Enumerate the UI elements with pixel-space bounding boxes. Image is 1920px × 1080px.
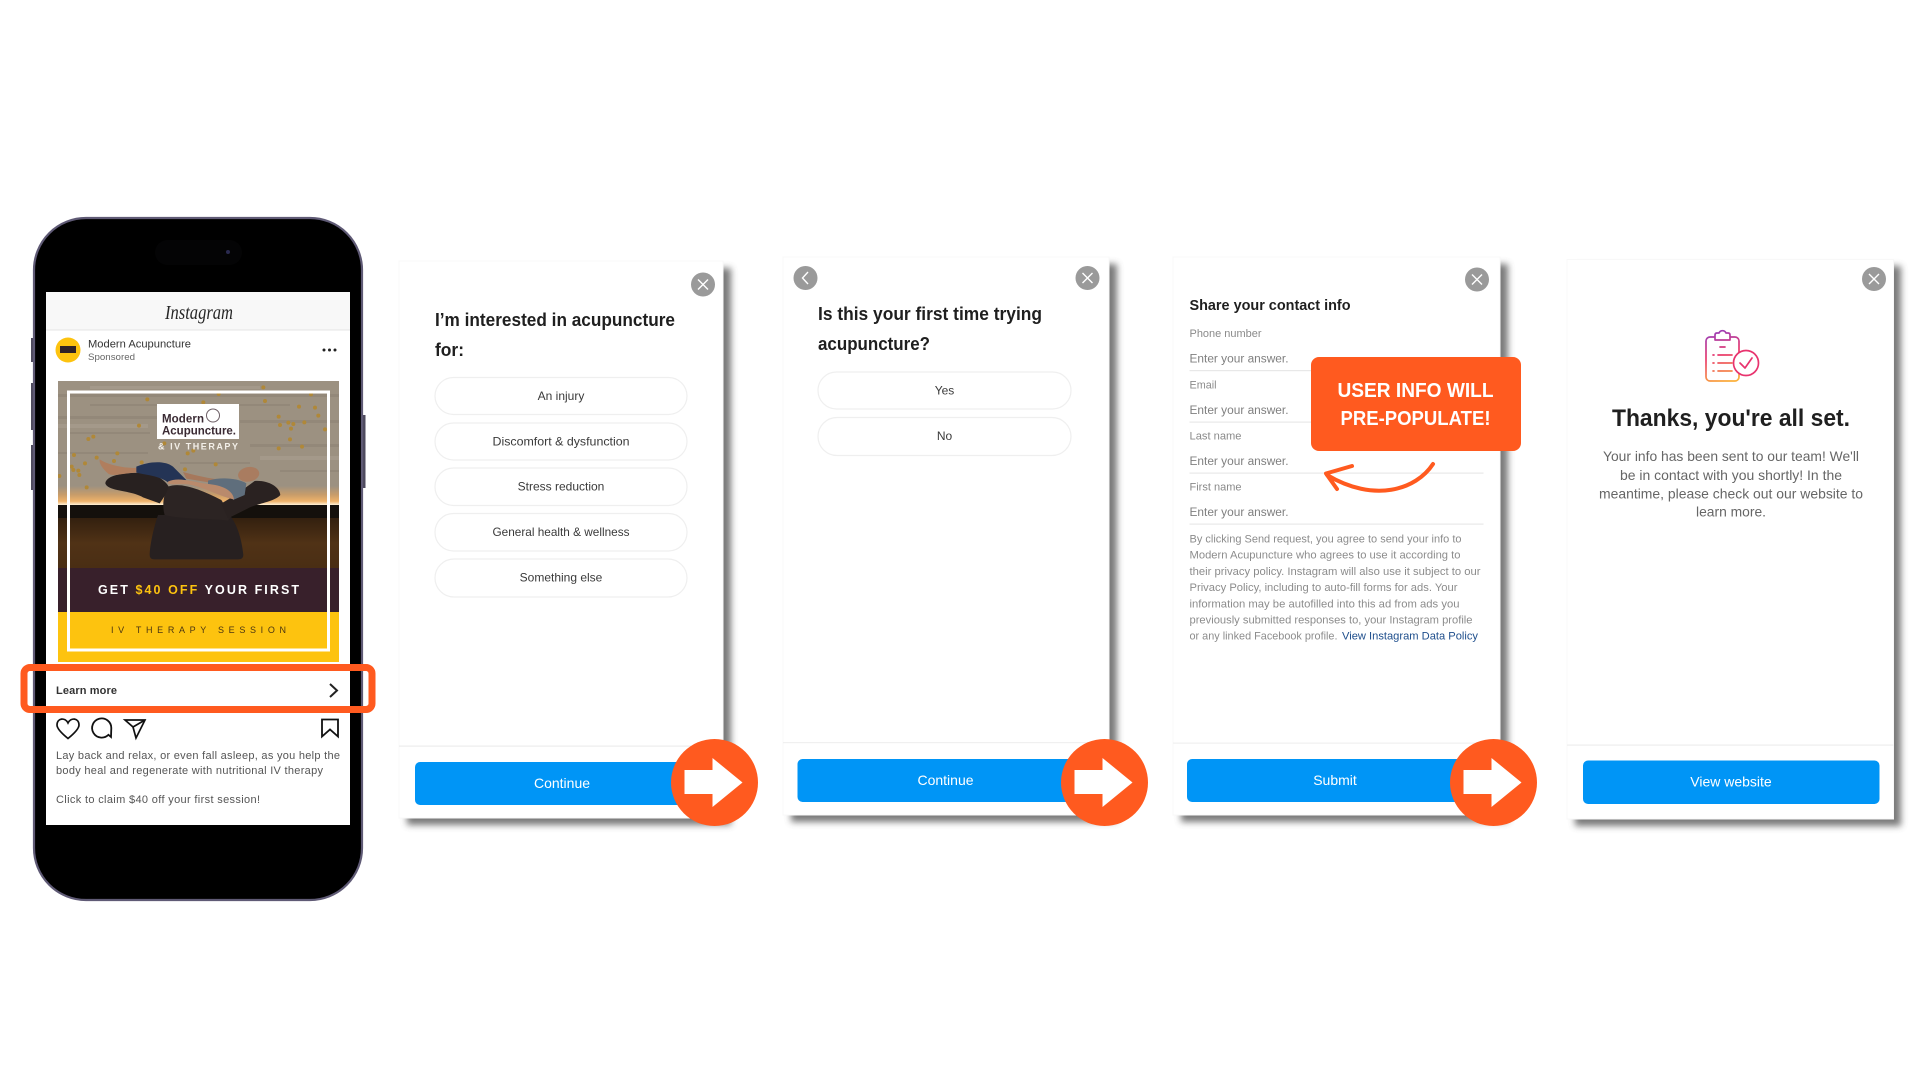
instagram header bar: Instagram [164,302,233,324]
panel: question 2 [783,257,1117,822]
consent text: By clicking Send request, you agree to send your info to [1190,534,1462,546]
answer options: General health & wellness [492,525,630,539]
question heading [435,310,675,360]
learn more row [56,684,337,697]
dynamic island and camera [155,240,242,265]
panel shadow [1575,266,1901,826]
footer divider [1173,742,1500,744]
consent text: or any linked Facebook profile. [1190,630,1338,642]
form fields: Enter your answer. [1190,507,1288,519]
panel shadow [791,264,1117,822]
form fields: Email [1190,380,1216,392]
phone side buttons [31,338,366,490]
arrow badge 1 [671,739,758,826]
form fields: Enter your answer. [1190,405,1288,417]
panel: contact form [1173,257,1508,822]
arrow badge 3 [1450,739,1537,826]
logo box: Acupuncture. [162,426,236,438]
curved arrow to form [1326,464,1433,491]
close button [1076,266,1100,290]
logo box [157,404,239,439]
confirmation message: learn more. [1696,504,1766,520]
gold dots [57,385,327,489]
answer options: Stress reduction [518,480,604,494]
form fields [1190,328,1484,525]
panel card [783,257,1109,815]
form fields: Last name [1190,430,1242,442]
answer options: Yes [935,384,954,398]
answer options [818,372,1071,456]
therapy label: & IV THERAPY [158,442,238,452]
question heading [818,304,1042,354]
post caption [56,750,340,806]
highlight rectangle [24,668,372,710]
callout: user info: PRE-POPULATE! [1340,408,1490,430]
close button [1465,268,1489,292]
confirmation message: meantime, please check out our website to [1599,486,1863,502]
panel card [399,261,723,818]
icon: heart [57,719,79,738]
confirmation message [1599,448,1863,520]
consent text: Modern Acupuncture who agrees to use it according to [1190,550,1460,562]
back button [794,266,818,290]
panel card [1173,257,1500,815]
answer options: An injury [538,389,584,403]
icon: bookmark [322,720,338,736]
promo band: GET $40 OFF YOUR FIRST [98,583,299,597]
learn more row: Learn more [56,685,117,697]
sponsor name [88,338,191,363]
continue button [415,762,700,805]
footer divider [1567,744,1894,746]
sponsor name: Sponsored [88,352,135,363]
callout: user info: USER INFO WILL [1338,380,1494,402]
ad creative [57,381,339,662]
submit button: Submit [1313,772,1357,788]
consent text: Privacy Policy, including to auto-fill forms for ads. Your [1190,582,1458,594]
question heading: I’m interested in acupuncture [435,310,675,330]
consent text: View Instagram Data Policy [1342,630,1478,642]
icon: clipboard with check [1706,331,1758,381]
promo band [58,568,339,612]
post caption: Lay back and relax, or even fall asleep, as you help the [56,750,340,762]
ad photo [57,381,339,568]
callout: user info [1311,357,1521,451]
close button [1862,267,1886,291]
icon: send [125,720,145,738]
post caption: Click to claim $40 off your first session! [56,794,260,806]
sponsor name: Modern Acupuncture [88,338,191,350]
post caption: body heal and regenerate with nutritional IV therapy [56,765,324,777]
phone body [34,218,362,900]
view website button [1583,760,1880,804]
close button [691,272,715,296]
arrow badge 2 [1061,739,1148,826]
instagram header bar [46,292,350,330]
confirmation message: Your info has been sent to our team! We'll [1603,448,1859,464]
answer options: No [937,429,952,443]
continue button: Continue [534,775,590,791]
question heading: acupuncture? [818,334,930,354]
phone screen [46,292,350,825]
panel: confirmation [1567,260,1901,826]
form fields: Enter your answer. [1190,354,1288,366]
panel shadow [1181,264,1508,822]
answer options: Discomfort & dysfunction [492,434,630,448]
panel: question 1 [399,261,731,825]
panel card [1567,260,1894,819]
view website button: View website [1690,774,1772,790]
footer divider [783,742,1109,743]
form fields: Enter your answer. [1190,456,1288,468]
consent text: information may be autofilled into this ad from ads you [1190,598,1460,610]
form fields: First name [1190,482,1242,494]
yellow band: IV THERAPY SESSION [111,625,286,635]
question heading: for: [435,340,464,360]
white frame [68,392,328,650]
consent text [1190,534,1481,642]
continue button: Continue [917,772,974,788]
question heading: Is this your first time trying [818,304,1042,324]
form heading: Share your contact info [1190,297,1350,314]
form fields: Phone number [1190,328,1262,340]
confirmation heading: Thanks, you're all set. [1612,405,1850,432]
answer options [435,378,687,597]
person in massage chair [100,459,280,559]
phone mockup [24,218,372,900]
confirmation message: be in contact with you shortly! In the [1620,467,1842,483]
icon: comment [92,718,111,738]
submit button [1187,759,1477,802]
continue button [798,759,1088,802]
consent text: previously submitted responses to, your Instagram profile [1190,614,1472,626]
consent text: their privacy policy. Instagram will also use it subject to our [1190,566,1481,578]
answer options: Something else [520,570,603,584]
sponsor avatar [56,338,80,362]
logo box: Modern [162,414,204,426]
panel shadow [407,268,731,825]
footer divider [399,746,723,747]
yellow band [58,612,339,662]
more options dots [322,348,336,352]
